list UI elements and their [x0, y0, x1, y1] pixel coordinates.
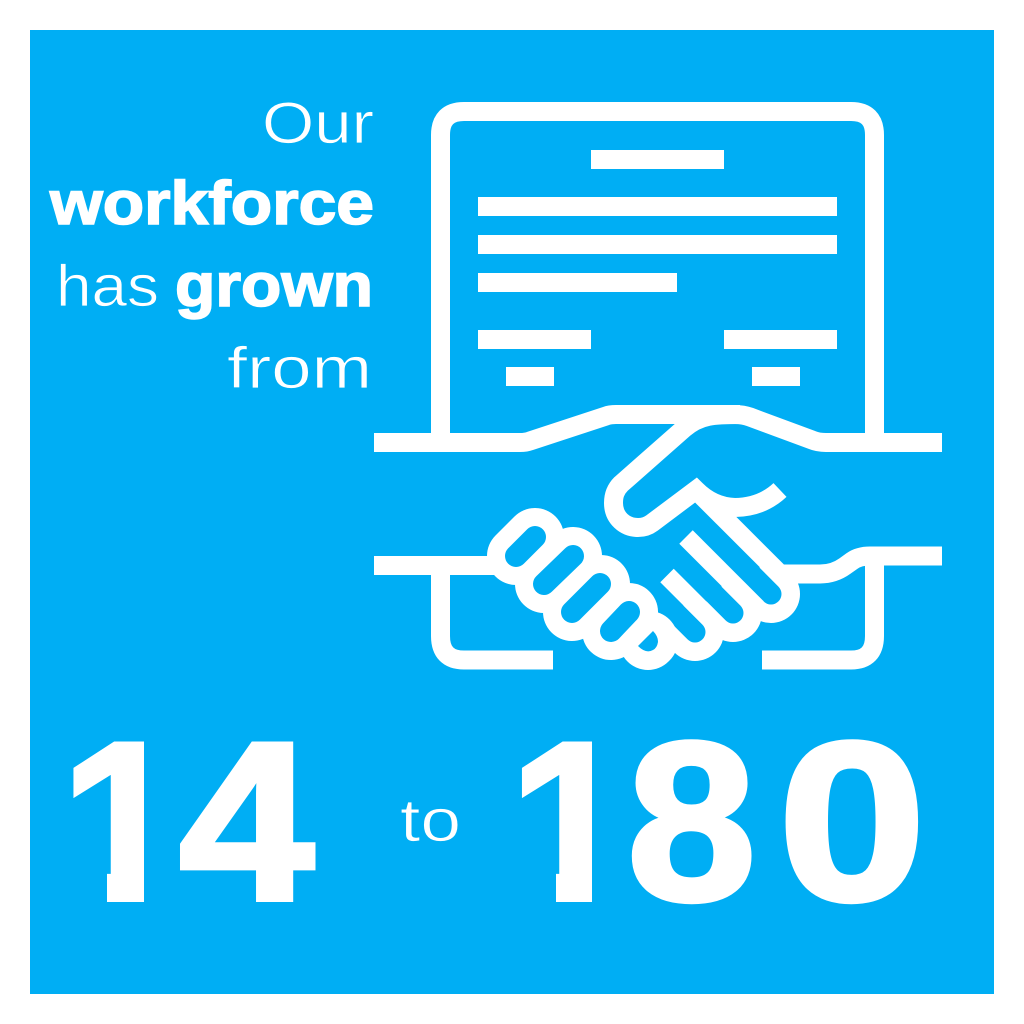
lower arm right — [780, 556, 942, 574]
document text lines — [478, 150, 837, 386]
label: to: to — [400, 787, 461, 854]
right hand finger tips — [666, 565, 800, 661]
heading: our workforce has grown from: Our — [262, 91, 374, 156]
heading: our workforce has grown from: workforce — [49, 169, 374, 237]
upper hand thumb — [614, 414, 780, 528]
number: 14 — [73, 742, 316, 902]
right hand finger gaps — [640, 528, 771, 632]
number: 14: 1 — [60, 694, 186, 948]
number: 180 — [522, 739, 918, 904]
left fist silhouette — [516, 537, 649, 641]
document frame — [440, 112, 874, 433]
heading: our workforce has grown from: has — [56, 254, 159, 319]
small gap at fist base — [638, 631, 658, 651]
number: 180: 1 — [509, 694, 635, 948]
right hand finger bars — [667, 494, 786, 628]
icon: contract and handshake — [374, 112, 942, 661]
lower sleeve right — [762, 560, 874, 660]
number: 180: 8 — [627, 695, 756, 948]
left fist finger gaps — [516, 537, 629, 631]
heading: our workforce has grown from: grown — [175, 251, 373, 319]
lower arm left — [374, 556, 500, 575]
upper arm and hand outline — [374, 414, 942, 442]
heading: our workforce has grown from — [49, 91, 374, 401]
heading: our workforce has grown from: from — [227, 336, 372, 401]
number: 14: 4 — [179, 695, 314, 948]
lower sleeve left — [440, 570, 553, 660]
number: 180: 0 — [778, 695, 926, 948]
